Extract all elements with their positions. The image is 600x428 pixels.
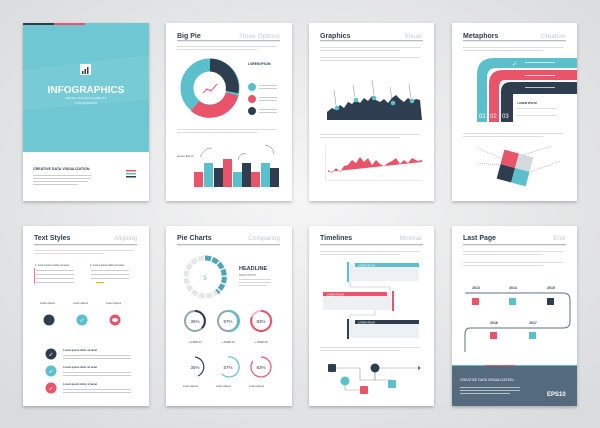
rings row 1: 83%	[256, 319, 266, 324]
panel: big pie: LOREM IPSUM	[248, 62, 271, 66]
panel: graphics: Graphics	[320, 33, 350, 40]
timeline boxes: LOREM IPSUM	[327, 294, 344, 296]
checklist: Lorem ipsum dolor sit amet	[63, 365, 97, 369]
panel: last page: Last Page	[463, 235, 496, 242]
puzzle	[497, 150, 533, 186]
bar chart	[177, 145, 279, 187]
legend circles	[248, 83, 277, 115]
panel: timelines: Timelines	[320, 235, 352, 242]
chart: area navy	[327, 80, 422, 120]
panel: text styles	[23, 226, 149, 406]
ribbons: 03	[502, 114, 509, 120]
text: creative data visualization: CREATIVE DATA VISUALIZATION	[33, 167, 90, 171]
panel: metaphors: Creative	[541, 33, 565, 40]
checklist: Lorem ipsum dolor sit amet	[63, 348, 97, 352]
panel: metaphors: LOREM IPSUM	[517, 101, 537, 105]
panel: timelines	[309, 226, 434, 406]
panel: last page: End	[553, 235, 565, 242]
panel: text styles: 2. Lorem ipsum dolor sit amet	[90, 263, 124, 267]
panel: graphics: Visual	[404, 33, 423, 40]
panel: cover: FOR BUSINESS	[75, 101, 97, 105]
panel: cover: BRAND VECTOR ELEMENTS	[66, 96, 106, 100]
panel: pie charts: Pie Charts	[177, 235, 212, 242]
rings row 1: 57%	[223, 319, 233, 324]
panel: big pie: Big Pie	[177, 33, 201, 40]
panel: pie charts: FIRST OPTION	[239, 274, 256, 277]
icons circles: ✓	[79, 318, 85, 324]
process flow	[328, 364, 421, 394]
chart: area red	[325, 145, 422, 180]
segmented ring: 5	[203, 276, 207, 282]
panel: cover	[23, 23, 149, 201]
rings row 2: 57%	[223, 365, 233, 370]
rings row 1: 35%	[190, 319, 200, 324]
footer band: CREATIVE DATA VISUALIZATION	[460, 378, 514, 382]
panel: text styles: Text Styles	[34, 235, 71, 242]
panel: pie charts: HEADLINE	[239, 266, 267, 272]
panel: text styles: 1. Lorem ipsum dolor sit amet	[35, 263, 69, 267]
panel: graphics	[309, 23, 434, 201]
panel: timelines: Minimal	[400, 235, 423, 242]
timeline years: 2015	[547, 286, 555, 290]
footer band	[452, 365, 577, 406]
icon: chart	[80, 64, 91, 75]
icons circles	[40, 301, 121, 326]
timeline years: 2014	[509, 286, 517, 290]
timeline years: 2017	[529, 321, 537, 325]
timeline boxes: LOREM IPSUM	[358, 322, 375, 324]
ribbons	[477, 58, 577, 122]
rings row 2: 35%	[190, 365, 200, 370]
timeline years	[465, 286, 570, 352]
checklist: Lorem ipsum dolor sit amet	[63, 382, 97, 386]
checklist: ✓	[48, 386, 54, 392]
timeline years: 2016	[490, 321, 498, 325]
icons circles: Lorem Ipsum	[106, 301, 121, 305]
panel: metaphors: Metaphors	[463, 33, 498, 40]
panel: metaphors	[452, 23, 577, 201]
panel: pie charts	[166, 226, 292, 406]
rings row 1: + STEP 01	[188, 340, 202, 344]
icons circles: Lorem Ipsum	[73, 301, 88, 305]
rings row 2: 83%	[256, 365, 266, 370]
rings row 1: + STEP 03	[254, 340, 268, 344]
timeline boxes	[323, 262, 419, 339]
panel: pie charts: Comparing	[248, 235, 280, 242]
footer band: EPS10	[547, 392, 566, 398]
icons circles: Lorem Ipsum	[40, 301, 55, 305]
timeline years: 2013	[472, 286, 480, 290]
ribbons: 02	[490, 114, 497, 120]
checklist: ✓	[48, 370, 54, 376]
timeline boxes: LOREM IPSUM	[358, 264, 375, 268]
segmented ring	[186, 258, 224, 296]
chart: donut	[187, 65, 233, 111]
rings row 2: Lorem Ipsum	[216, 384, 231, 388]
bar chart: Lorem Ipsum	[177, 154, 194, 158]
panel: text styles: Aligning	[114, 235, 137, 242]
rings row 1: + STEP 02	[221, 340, 235, 344]
rings row 2: Lorem Ipsum	[249, 384, 264, 388]
ribbons: ✓	[512, 62, 517, 68]
rings row 1	[185, 311, 271, 344]
rings row 2: Lorem Ipsum	[183, 384, 198, 388]
title: infographics: INFOGRAPHICS	[48, 85, 125, 96]
checklist: ✓	[48, 352, 54, 358]
panel: big pie: Three Options	[239, 33, 281, 40]
checklist	[46, 348, 131, 394]
rings row 2	[183, 357, 271, 388]
panel: big pie	[166, 23, 292, 201]
panel: last page	[452, 226, 577, 406]
ribbons: 01	[479, 114, 486, 120]
